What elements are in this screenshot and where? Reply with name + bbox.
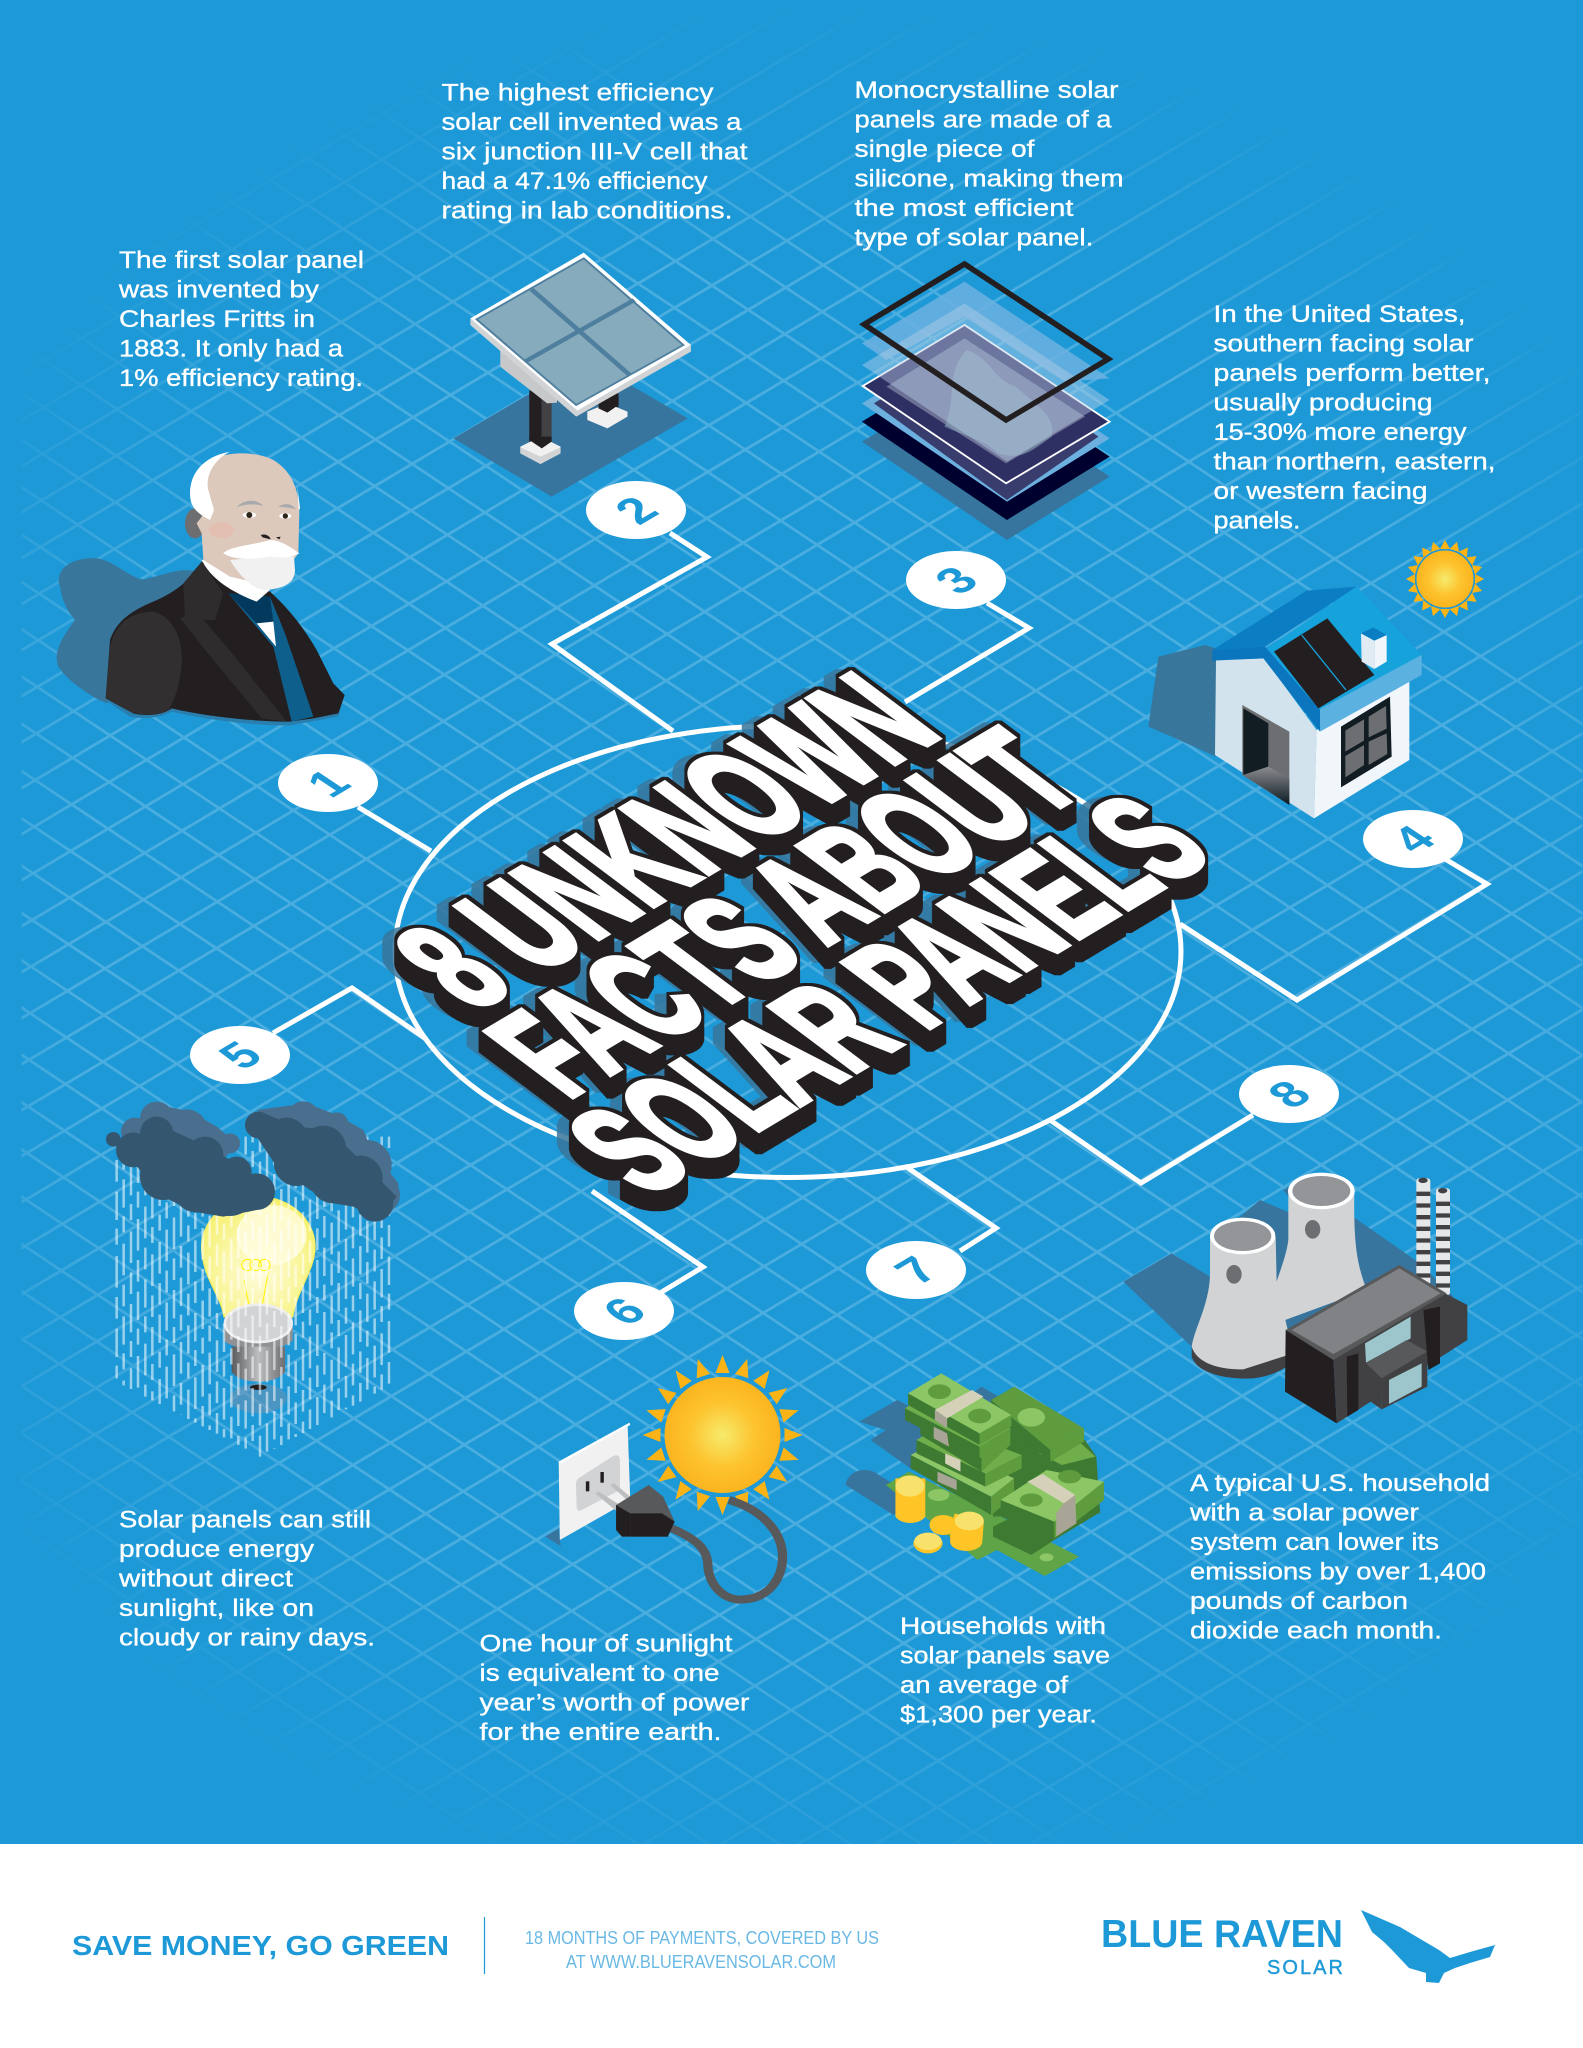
text: fact 4: [1214, 301, 1496, 534]
icon: wall outlet and plug: [545, 1423, 783, 1600]
footer offer text: 18 MONTHS OF PAYMENTS, COVERED BY US: [525, 1927, 879, 1948]
text: fact 4: In the United States,: [1214, 301, 1466, 328]
icon: small sun: [1406, 540, 1484, 618]
text: fact 7: Households with: [900, 1613, 1106, 1640]
text: fact 6: for the entire earth.: [480, 1719, 722, 1746]
number badge 1: [278, 754, 378, 812]
number badge 4: 4: [1380, 818, 1448, 861]
clouds: [106, 1101, 400, 1222]
text: fact 3: [854, 77, 1124, 252]
footer slogan: SAVE MONEY, GO GREEN: [72, 1930, 449, 1961]
text: fact 2: The highest efficiency: [442, 80, 714, 106]
connector 3: [905, 603, 1029, 702]
number badge 7: [866, 1241, 966, 1299]
text: fact 3: single piece of: [854, 136, 1035, 163]
text: fact 4: than northern, eastern,: [1214, 448, 1496, 476]
text: fact 7: solar panels save: [900, 1642, 1110, 1670]
icon: monocrystalline panel layers: [862, 264, 1110, 540]
number badge 6: [574, 1282, 674, 1340]
number badge 1: 1: [295, 762, 362, 805]
text: fact 5: sunlight, like on: [119, 1595, 314, 1622]
icon: solar panel on stand: [453, 253, 691, 497]
text: fact 1: 1% efficiency rating.: [119, 365, 363, 392]
connector 4: [1180, 859, 1487, 1000]
number badge 2: [586, 481, 686, 539]
text: fact 2: solar cell invented was a: [442, 109, 742, 136]
title: FACTS ABOUT: [454, 706, 1114, 1120]
footer panel: [0, 1844, 1583, 2048]
text: fact 1: was invented by: [118, 276, 320, 304]
text: fact 8: with a solar power: [1189, 1500, 1419, 1526]
text: fact 1: 1883. It only had a: [119, 336, 343, 362]
number badge 5: 5: [207, 1034, 274, 1077]
text: fact 3: Monocrystalline solar: [854, 77, 1118, 104]
icon: money and coins: [846, 1373, 1104, 1576]
text: fact 6: One hour of sunlight: [480, 1630, 733, 1658]
text: fact 3: silicone, making them: [854, 166, 1124, 192]
text: fact 4: southern facing solar: [1214, 330, 1474, 358]
text: fact 2: [442, 80, 748, 224]
text: fact 5: [118, 1506, 375, 1652]
text: fact 7: $1,300 per year.: [900, 1702, 1097, 1728]
logo: Blue Raven Solar wordmark: [1101, 1913, 1343, 1979]
text: fact 5: cloudy or rainy days.: [119, 1624, 375, 1652]
central ellipse: [395, 726, 1181, 1178]
icon: lightbulb in the rain: [106, 1101, 400, 1457]
number badge 5: [190, 1026, 290, 1084]
text: fact 7: [900, 1613, 1110, 1728]
text: fact 4: usually producing: [1214, 390, 1432, 416]
icon: big sun: [642, 1355, 802, 1515]
text: fact 8: system can lower its: [1190, 1529, 1439, 1556]
text: fact 8: [1189, 1470, 1490, 1644]
number badge 8: [1239, 1065, 1339, 1123]
text: fact 8: pounds of carbon: [1190, 1588, 1408, 1615]
text: fact 8: emissions by over 1,400: [1190, 1558, 1486, 1586]
text: fact 4: panels perform better,: [1214, 360, 1490, 387]
title: [360, 650, 1243, 1217]
text: fact 4: panels.: [1214, 508, 1300, 534]
logo: Blue Raven Solar wordmark: SOLAR: [1267, 1957, 1343, 1979]
number badge 3: 3: [923, 559, 990, 602]
logo: Blue Raven Solar wordmark: BLUE RAVEN: [1101, 1913, 1343, 1956]
text: fact 6: year’s worth of power: [480, 1690, 750, 1716]
number badge 2: 2: [603, 489, 670, 532]
connector 6: [592, 1191, 703, 1293]
logo: raven icon: [1361, 1910, 1495, 1983]
number badge 3: [906, 551, 1006, 609]
icon: power plant: [1123, 1173, 1467, 1423]
text: fact 7: an average of: [900, 1672, 1068, 1699]
text: fact 1: The first solar panel: [119, 247, 364, 274]
footer divider: [484, 1917, 486, 1974]
number badge 6: 6: [591, 1290, 658, 1333]
text: fact 5: produce energy: [119, 1536, 315, 1563]
text: fact 6: is equivalent to one: [480, 1660, 720, 1687]
text: fact 3: the most efficient: [854, 195, 1074, 222]
text: fact 2: rating in lab conditions.: [442, 198, 732, 224]
connector 1: [358, 807, 431, 851]
icon: Charles Fritts portrait: [57, 452, 345, 725]
text: fact 2: six junction III-V cell that: [442, 138, 748, 166]
icon: house with solar roof and sun: [1148, 587, 1422, 818]
text: fact 5: Solar panels can still: [119, 1506, 371, 1534]
title: 8 UNKNOWN: [360, 650, 971, 1033]
connector 2: [552, 533, 707, 731]
text: fact 4: or western facing: [1214, 478, 1428, 505]
connector 7: [905, 1166, 996, 1251]
text: fact 5: without direct: [118, 1566, 293, 1592]
text: fact 6: [480, 1630, 750, 1746]
text: fact 2: had a 47.1% efficiency: [442, 168, 708, 195]
text: fact 3: panels are made of a: [854, 106, 1112, 134]
rain streaks: [117, 1137, 389, 1457]
footer offer text: AT WWW.BLUERAVENSOLAR.COM: [566, 1951, 836, 1972]
number badge 8: 8: [1256, 1073, 1323, 1116]
text: fact 4: 15-30% more energy: [1214, 419, 1467, 446]
text: fact 1: Charles Fritts in: [119, 306, 315, 333]
text: fact 3: type of solar panel.: [854, 224, 1094, 252]
number badge 4: [1363, 810, 1463, 868]
connector 5: [273, 988, 426, 1039]
text: fact 1: [118, 247, 364, 392]
footer offer text: [525, 1927, 879, 1972]
connector 8: [1050, 1115, 1253, 1183]
text: fact 8: A typical U.S. household: [1190, 1470, 1490, 1497]
number badge 7: 7: [883, 1249, 950, 1292]
text: fact 8: dioxide each month.: [1190, 1618, 1442, 1644]
